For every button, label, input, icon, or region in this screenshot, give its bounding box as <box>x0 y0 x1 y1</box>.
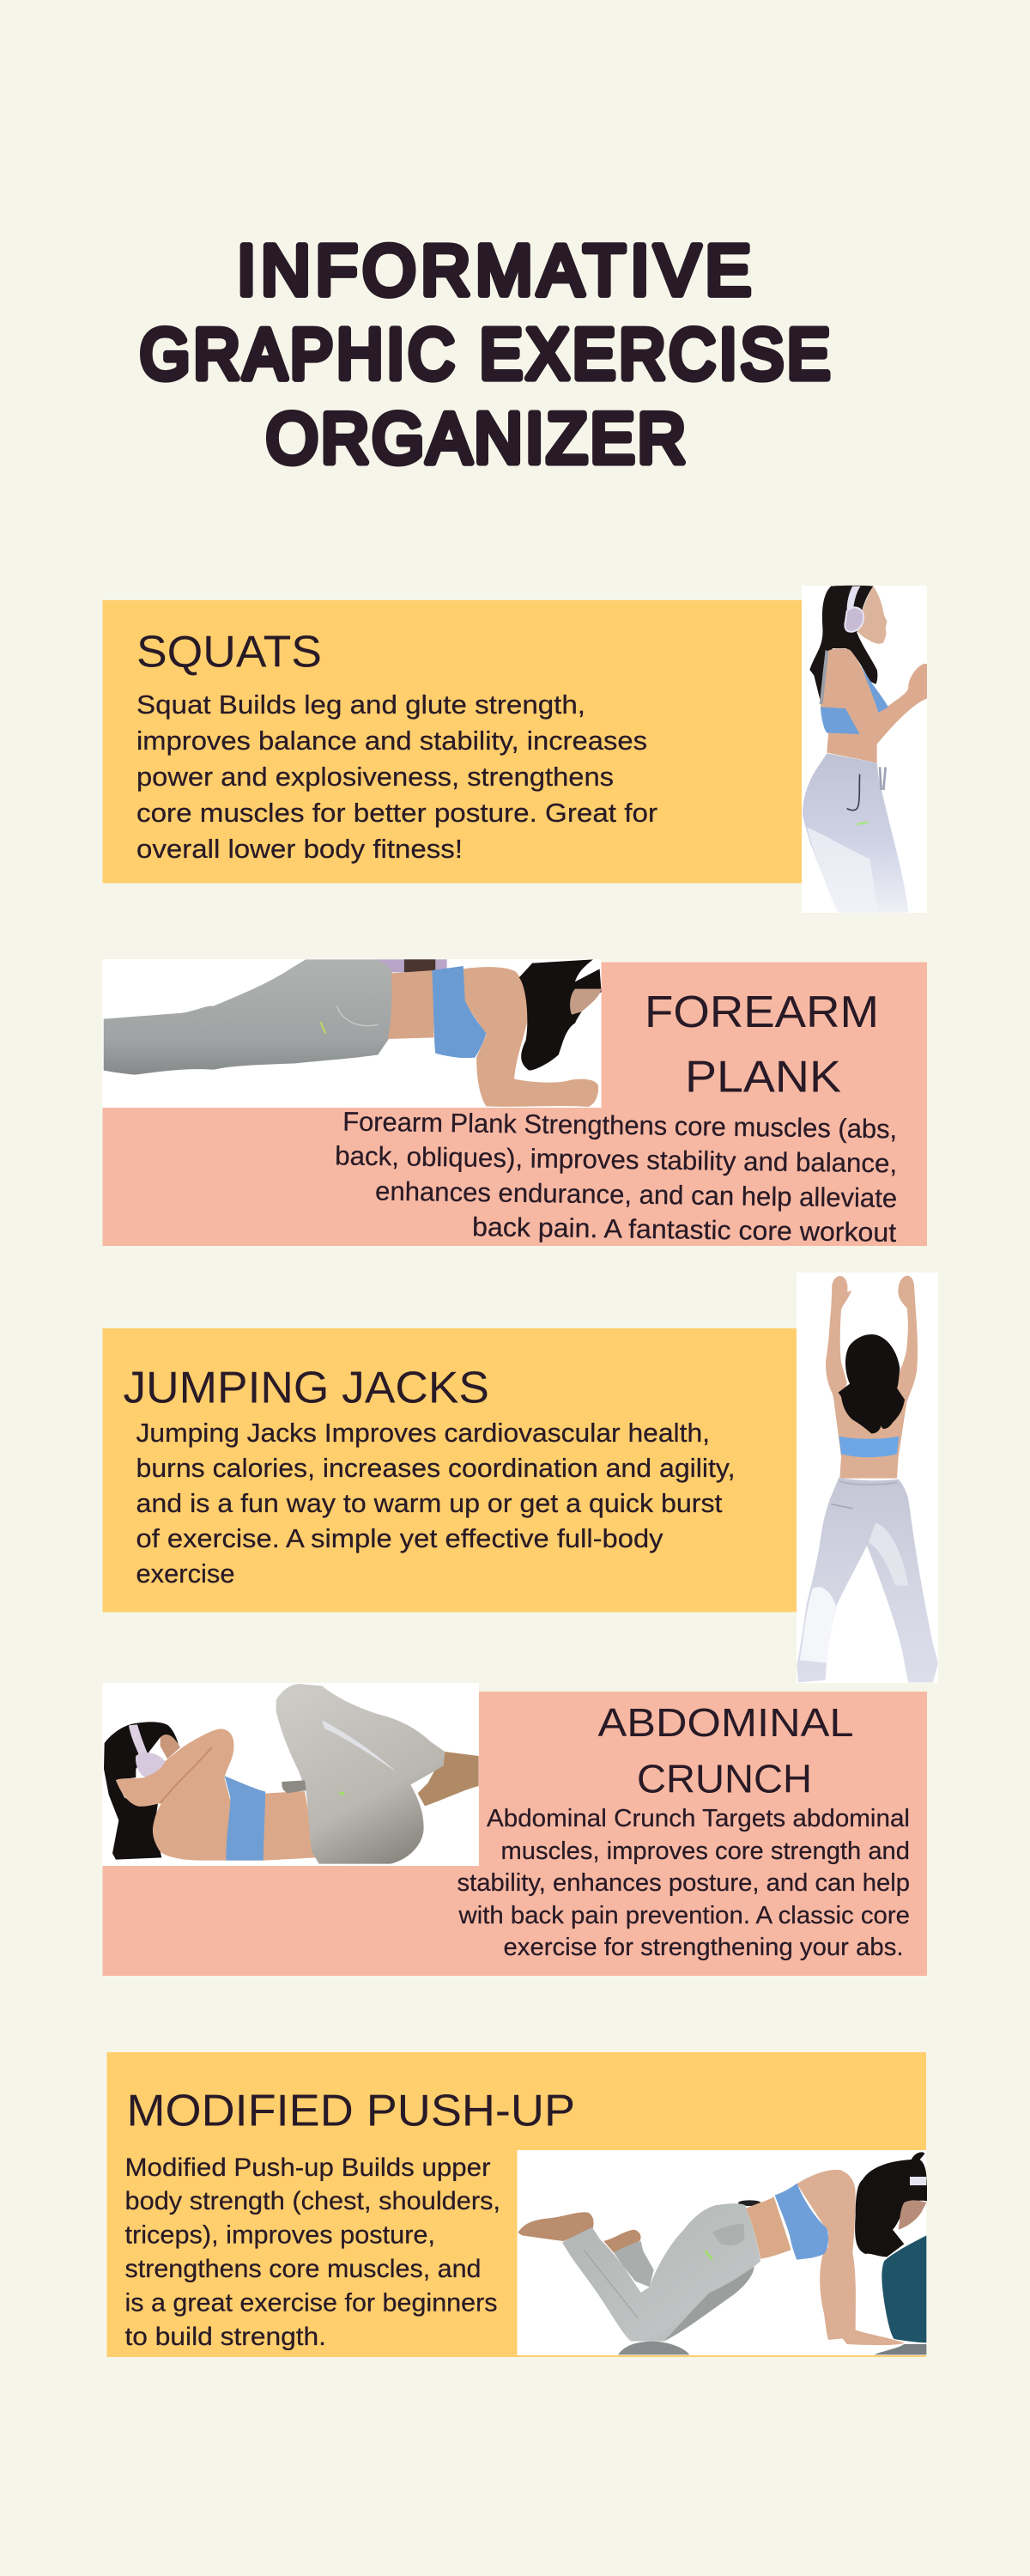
text block: jumping jacks description <box>136 1418 735 1589</box>
text block: squats description: core muscles for better posture. Great for <box>136 798 657 828</box>
text block: squats description: overall lower body fitness! <box>136 834 463 864</box>
heading: abdominal crunch <box>597 1700 853 1801</box>
heading: forearm plank: FOREARM <box>645 987 879 1037</box>
white photo background: plank <box>103 959 601 1108</box>
figure: person with arms raised <box>797 1276 938 1682</box>
text block: modified push-up description: is a great exercise for beginners <box>125 2289 498 2317</box>
heading: abdominal crunch: CRUNCH <box>637 1757 812 1801</box>
text block: forearm plank description: back, obliques), improves stability and balance, <box>335 1140 897 1178</box>
panel: modified push-up <box>106 2052 927 2357</box>
text block: modified push-up description: Modified Push-up Builds upper <box>125 2154 491 2182</box>
text block: modified push-up description <box>125 2154 500 2351</box>
heading: jumping jacks: JUMPING JACKS <box>124 1364 489 1413</box>
panel: abdominal crunch <box>103 1683 927 1976</box>
text block: forearm plank description: Forearm Plank Strengthens core muscles (abs, <box>342 1106 897 1144</box>
panel: jumping jacks <box>103 1273 938 1683</box>
text block: modified push-up description: to build strength. <box>125 2323 326 2351</box>
heading: squats: SQUATS <box>136 627 322 677</box>
text block: squats description: improves balance and stability, increases <box>136 726 647 756</box>
heading: abdominal crunch: ABDOMINAL <box>597 1700 853 1745</box>
white photo background: jumping jacks <box>797 1273 938 1683</box>
text block: forearm plank description: enhances endurance, and can help alleviate <box>375 1176 897 1213</box>
text block: abdominal crunch description: muscles, improves core strength and <box>501 1838 910 1865</box>
text block: abdominal crunch description: exercise for strengthening your abs. <box>503 1934 903 1961</box>
text block: squats description <box>136 690 657 864</box>
heading: forearm plank: PLANK <box>685 1053 841 1103</box>
text block: abdominal crunch description: with back pain prevention. A classic core <box>457 1902 910 1929</box>
text block: modified push-up description: triceps), improves posture, <box>125 2221 435 2250</box>
white photo background: push-up <box>517 2150 926 2355</box>
text block: forearm plank description <box>335 1106 897 1248</box>
title <box>140 231 830 478</box>
panel: squats <box>103 586 927 913</box>
text block: jumping jacks description: exercise <box>136 1558 235 1589</box>
heading: modified push-up: MODIFIED PUSH-UP <box>127 2087 575 2136</box>
text block: modified push-up description: body strength (chest, shoulders, <box>125 2187 500 2215</box>
text block: abdominal crunch description: Abdominal Crunch Targets abdominal <box>487 1805 910 1832</box>
text block: jumping jacks description: Jumping Jacks Improves cardiovascular health, <box>136 1418 710 1448</box>
text block: jumping jacks description: burns calories, increases coordination and agility, <box>136 1453 735 1483</box>
heading: forearm plank <box>645 987 879 1103</box>
white photo background: squats <box>802 586 927 913</box>
white photo background: crunch <box>103 1683 479 1866</box>
text block: modified push-up description: strengthens core muscles, and <box>125 2255 481 2283</box>
text block: forearm plank description: back pain. A fantastic core workout <box>472 1212 897 1248</box>
text block: jumping jacks description: and is a fun way to warm up or get a quick burst <box>136 1488 723 1518</box>
panel: forearm plank <box>103 959 927 1248</box>
title: ORGANIZER <box>266 398 686 478</box>
figure: forearm plank <box>104 959 602 1107</box>
figure: modified push-up <box>518 2152 927 2354</box>
text block: squats description: power and explosiveness, strengthens <box>136 762 614 792</box>
title: INFORMATIVE <box>237 231 751 310</box>
text block: jumping jacks description: of exercise. A simple yet effective full-body <box>136 1523 663 1553</box>
figure: abdominal crunch <box>104 1684 479 1864</box>
figure: person standing before squat <box>803 586 927 913</box>
text block: squats description: Squat Builds leg and glute strength, <box>136 690 585 720</box>
title: GRAPHIC EXERCISE <box>140 313 830 393</box>
text block: abdominal crunch description <box>457 1805 910 1961</box>
text block: abdominal crunch description: stability, enhances posture, and can help <box>457 1869 910 1897</box>
